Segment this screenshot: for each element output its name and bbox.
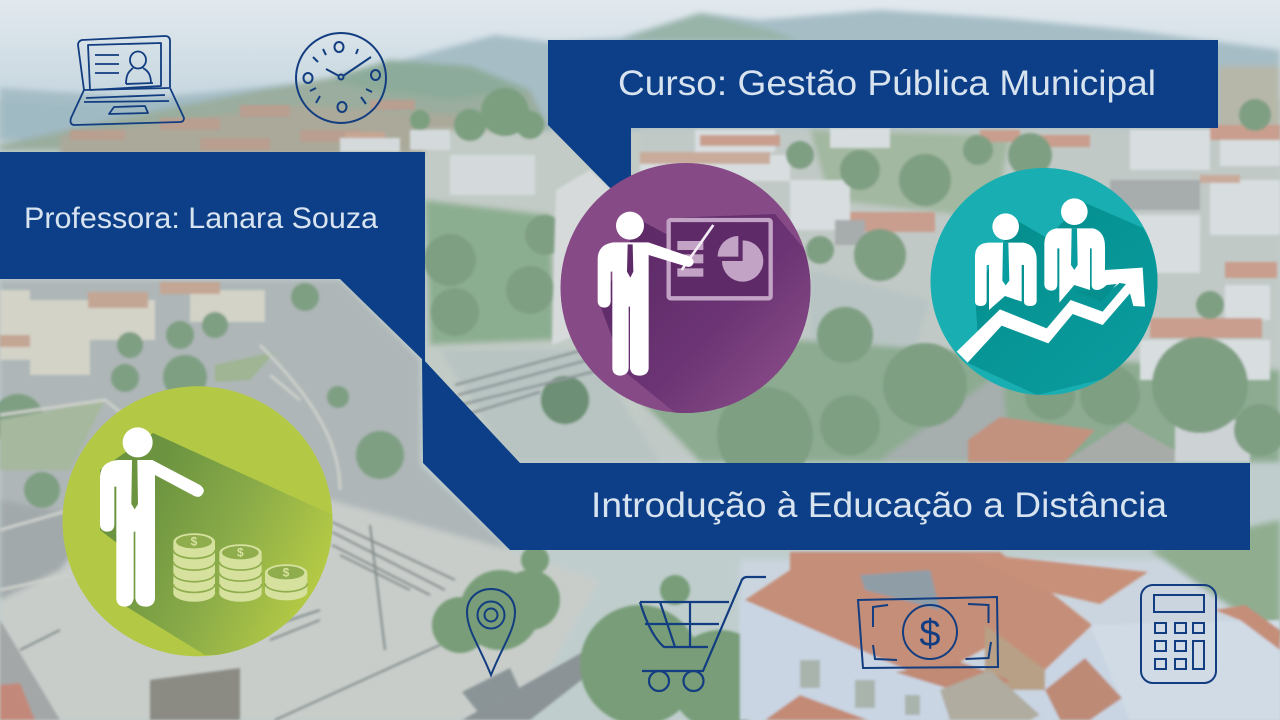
church <box>552 170 630 360</box>
coin stacks: $ <box>237 546 244 560</box>
icon: map pin <box>467 589 515 675</box>
icon: calculator <box>1141 585 1216 683</box>
top ribbon: course title <box>548 40 1218 190</box>
left ribbon: professor <box>0 152 425 362</box>
heading: lesson: Introdução à Educação a Distância <box>591 485 1167 525</box>
presentation board <box>669 220 771 298</box>
heading: course: Curso: Gestão Pública Municipal <box>618 63 1156 103</box>
coin stacks: $ <box>191 535 198 549</box>
coin stacks: $ <box>283 566 290 580</box>
icon: dollar banknote: $ <box>919 613 941 655</box>
lower house walls <box>740 600 985 720</box>
presenter figure <box>598 212 694 376</box>
hillside roofs and houses <box>70 100 415 150</box>
two business figures <box>975 198 1123 310</box>
upper right buildings <box>640 128 1280 380</box>
plaza stairs <box>332 522 455 595</box>
icon: laptop with profile <box>70 36 184 125</box>
bottom ribbon: lesson title <box>422 358 1250 550</box>
lower road <box>462 648 602 720</box>
rising arrow <box>957 268 1145 363</box>
plaza paths <box>0 345 340 590</box>
icon: green savings circle <box>62 386 335 656</box>
parked car <box>462 668 520 712</box>
icon: teal growth circle <box>930 168 1165 395</box>
icon: shopping cart <box>640 577 766 691</box>
icon: purple presenter circle <box>560 163 815 420</box>
pointer <box>682 225 713 270</box>
lower trees <box>432 546 770 720</box>
upper left plaza buildings <box>0 290 265 375</box>
coin stacks <box>173 533 307 602</box>
church steps <box>455 348 600 415</box>
icon: dollar banknote <box>858 597 998 668</box>
person figure <box>100 427 204 607</box>
text: professor name: Professora: Lanara Souza <box>24 202 378 235</box>
icon: wall clock <box>296 33 386 123</box>
lower roofs <box>745 552 1092 680</box>
